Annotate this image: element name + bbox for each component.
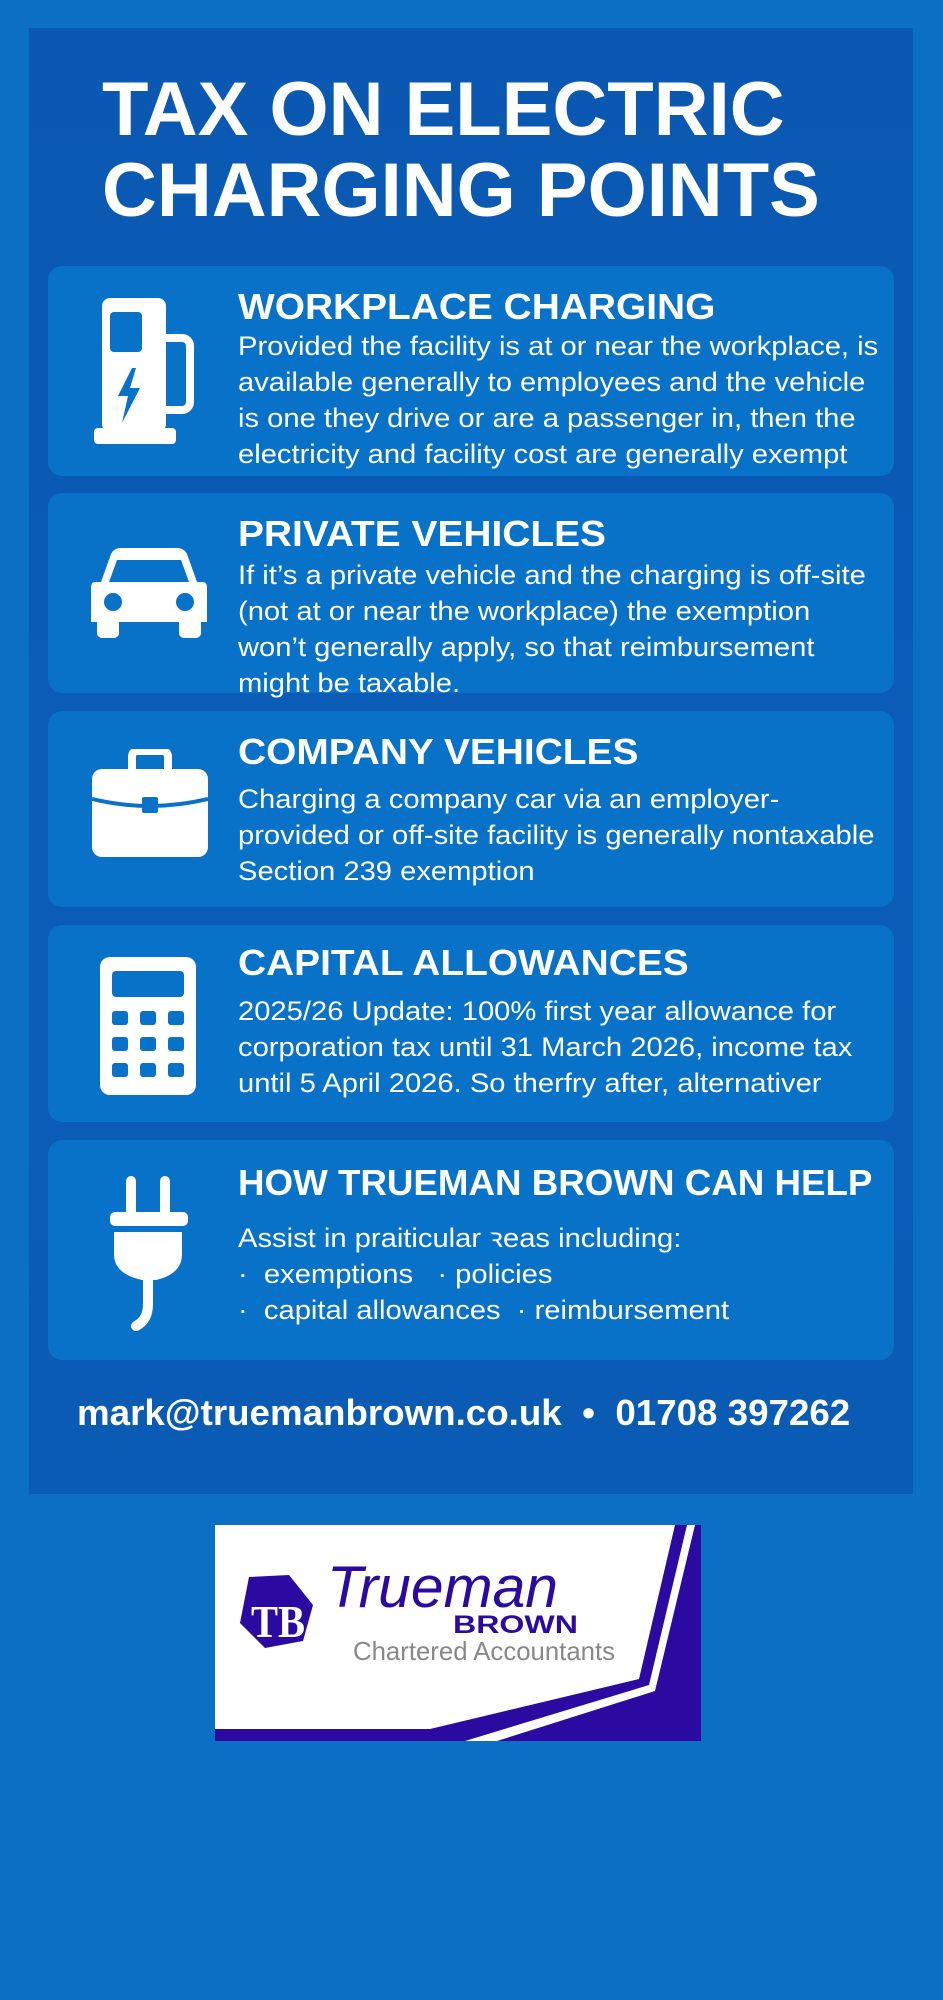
text block: electricity and facility cost are generally exempt bbox=[238, 439, 847, 469]
panel: how Trueman Brown can help bbox=[48, 1140, 894, 1360]
heading: COMPANY VEHICLES bbox=[238, 731, 638, 772]
logo: Trueman Brown: Chartered Accountants bbox=[353, 1636, 615, 1666]
text block: is one they drive or are a passenger in, then the bbox=[238, 403, 856, 433]
heading: PRIVATE VEHICLES bbox=[238, 513, 606, 554]
text block bbox=[238, 331, 878, 469]
text block: 2025/26 Update: 100% first year allowance for bbox=[238, 996, 836, 1026]
text block: Section 239 exemption bbox=[238, 856, 535, 886]
logo wordmark: Trueman bbox=[327, 1555, 558, 1620]
icon: calculator bbox=[100, 957, 196, 1095]
logo: Trueman Brown bbox=[215, 1525, 701, 1741]
background panel bbox=[29, 28, 913, 1494]
panel: company vehicles bbox=[48, 711, 894, 907]
text block: until 5 April 2026. So therfry after, alternativer bbox=[238, 1068, 822, 1098]
title: CHARGING POINTS bbox=[102, 148, 820, 233]
heading: HOW TRUEMAN BROWN CAN HELP bbox=[238, 1162, 872, 1203]
text block: provided or off-site facility is generally nontaxable bbox=[238, 820, 874, 850]
contact line: mark@truemanbrown.co.uk • 01708 397262 bbox=[77, 1392, 850, 1433]
logo stripes bbox=[215, 1525, 701, 1741]
panel: workplace charging bbox=[48, 266, 894, 476]
logo: Trueman Brown: BROWN bbox=[453, 1611, 578, 1639]
text block: might be taxable. bbox=[238, 668, 460, 698]
panel: capital allowances bbox=[48, 925, 894, 1122]
text block: Assist in praiticular ꝛeas including: bbox=[238, 1223, 681, 1253]
icon: briefcase bbox=[92, 749, 208, 857]
text block: · capital allowances · reimbursement bbox=[238, 1295, 729, 1325]
text block: Provided the facility is at or near the workplace, is bbox=[238, 331, 878, 361]
heading: WORKPLACE CHARGING bbox=[238, 286, 715, 327]
text block bbox=[238, 784, 874, 886]
heading: CAPITAL ALLOWANCES bbox=[238, 942, 689, 983]
text block: · exemptions · policies bbox=[238, 1259, 552, 1289]
text block: corporation tax until 31 March 2026, income tax bbox=[238, 1032, 852, 1062]
text block: If it’s a private vehicle and the charging is off-site bbox=[238, 560, 866, 590]
logo: Trueman Brown: TB bbox=[251, 1596, 305, 1647]
text block bbox=[238, 1223, 729, 1325]
text block: Charging a company car via an employer- bbox=[238, 784, 779, 814]
icon: car bbox=[91, 548, 207, 638]
logo mark TB bbox=[240, 1575, 313, 1648]
text block bbox=[238, 996, 852, 1098]
icon: charging pump bbox=[94, 298, 194, 444]
text block: won’t generally apply, so that reimbursement bbox=[238, 632, 814, 662]
text block: (not at or near the workplace) the exemption bbox=[238, 596, 810, 626]
title bbox=[102, 67, 820, 233]
title: TAX ON ELECTRIC bbox=[102, 67, 785, 152]
panel: private vehicles bbox=[48, 493, 894, 693]
text block: available generally to employees and the vehicle bbox=[238, 367, 865, 397]
icon: plug bbox=[110, 1176, 188, 1331]
text block bbox=[238, 560, 866, 698]
